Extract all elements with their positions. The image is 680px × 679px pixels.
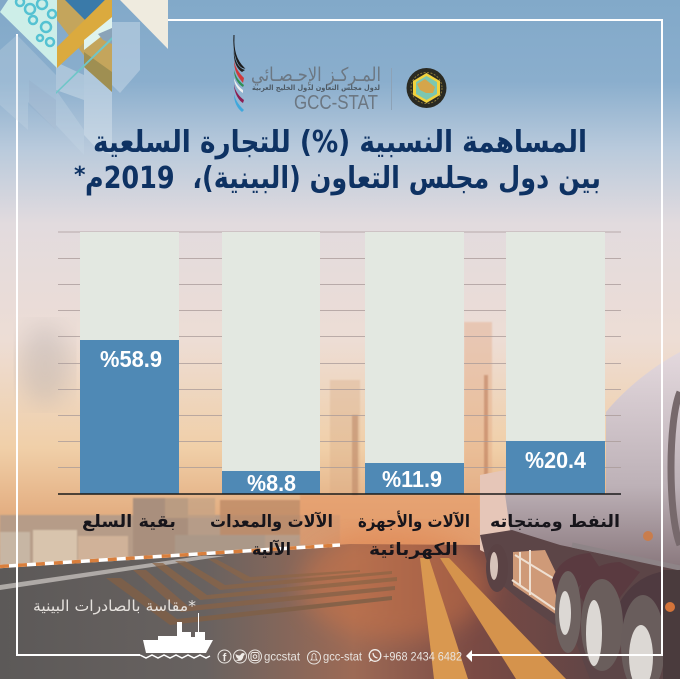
category label: rest of goods: بقية السلع: [82, 512, 176, 532]
bar: oil and its products 20.4%: [506, 232, 605, 494]
footnote: *مقاسة بالصادرات البينية: [33, 597, 197, 615]
truck: [480, 352, 680, 679]
background: haze on the left: [19, 325, 71, 405]
logo: GCC-STAT: [234, 35, 381, 114]
bar: rest of goods 58.9%: [80, 232, 179, 494]
category label: electrical: الكهربائية: [369, 540, 458, 560]
logo: GCC-STAT wordmark: GCC-STAT: [294, 92, 378, 114]
icon: whatsapp: [369, 650, 381, 662]
title: [74, 125, 601, 196]
icon: facebook: [218, 650, 231, 664]
bar: machines and electrical appliances 11.9%: [365, 232, 464, 494]
category label: oil: النفط ومنتجاته: [490, 512, 620, 532]
icon: twitter: [234, 650, 246, 663]
title line 2: بين دول مجلس التعاون (البينية)، 2019م: [85, 161, 601, 196]
title asterisk: *: [74, 163, 86, 188]
bar: rest of goods 58.9%: %58.9: [100, 346, 162, 372]
icon: GCC emblem: [406, 68, 446, 108]
icon: instagram: [248, 650, 262, 663]
arrow: [466, 650, 472, 662]
category label: electrical: [358, 511, 470, 560]
logo: Arabic name: المـركـز الإحـصـائي: [251, 64, 381, 86]
chart grid lines: [58, 232, 621, 468]
decoration: top-left geometric shapes: [0, 0, 168, 155]
bar: oil and its products 20.4%: %20.4: [525, 447, 586, 473]
category label: electrical: الآلات والأجهزة: [358, 511, 470, 532]
bar: machinery and mechanical equipment 8.8%: %8.8: [247, 470, 296, 496]
handle: gccstat: gccstat: [264, 650, 301, 664]
logo: coloured feather: [234, 35, 245, 112]
chart axis: [58, 493, 621, 495]
category label: machinery: [210, 511, 333, 560]
logo: Arabic subtitle: لدول مجلس التعاون لدول الخليج العربية: [252, 84, 380, 92]
icon: ship: [140, 613, 213, 658]
bar: machines and electrical appliances 11.9%: %11.9: [382, 466, 442, 492]
handle: gcc-stat: gcc-stat: [323, 650, 363, 664]
bar: machinery and mechanical equipment 8.8%: [222, 232, 320, 496]
background: refinery silhouettes: [0, 322, 492, 566]
bar chart: [58, 232, 621, 496]
phone number: +968 2434 6482: [383, 650, 462, 664]
category label: machinery: الآلات والمعدات: [210, 511, 333, 532]
title line 1: المساهمة النسبية (%) للتجارة السلعية: [93, 125, 587, 160]
social media contacts: [218, 650, 462, 664]
icon: snapchat: [308, 651, 320, 664]
background: road: [0, 530, 680, 679]
divider between logos: [391, 68, 392, 110]
category label: machinery: الآلية: [252, 539, 291, 560]
icon: facebook: f: [223, 652, 227, 664]
